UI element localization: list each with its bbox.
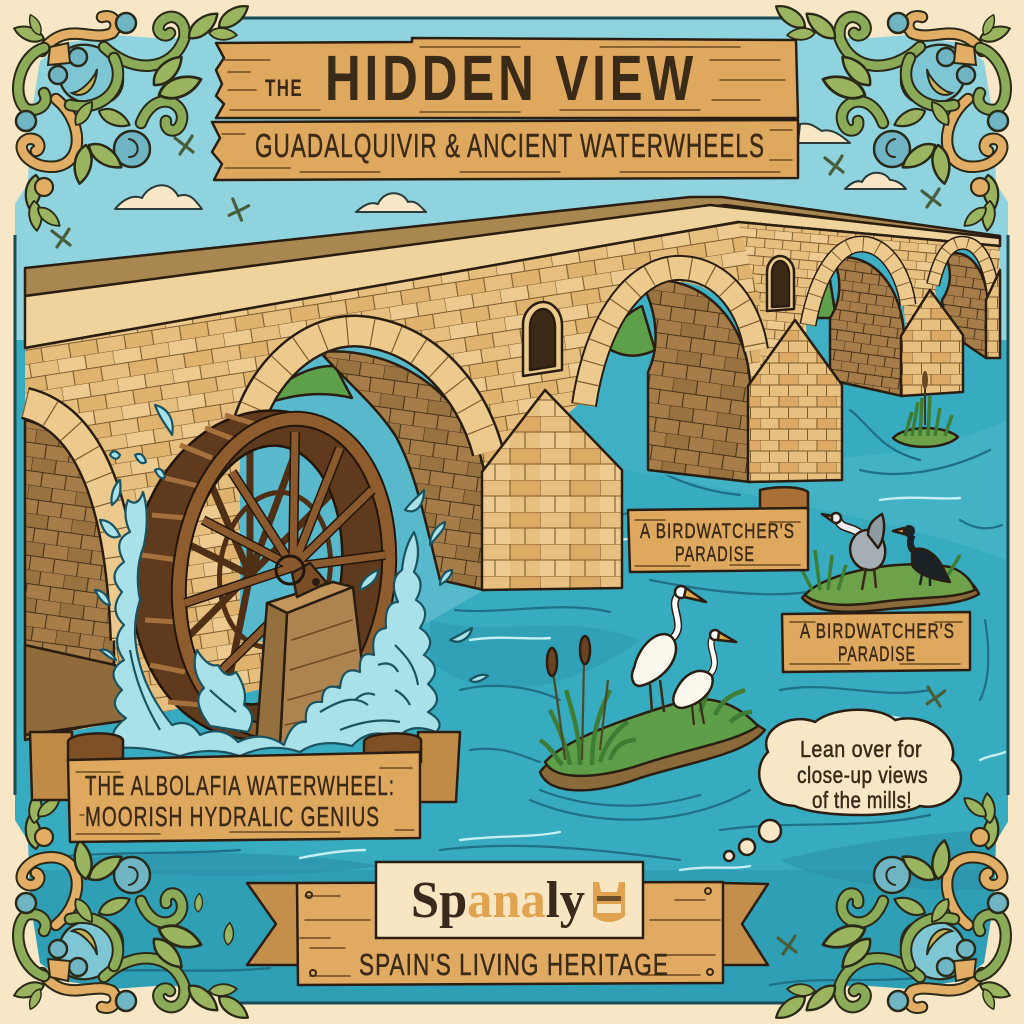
pedestal right face bbox=[280, 587, 370, 745]
pier 3 bbox=[748, 320, 842, 482]
brand emblem bbox=[593, 882, 625, 922]
window 1 bbox=[523, 302, 562, 376]
title small word: THE bbox=[265, 75, 303, 102]
leaves in water bbox=[192, 893, 237, 946]
title main: HIDDEN VIEW bbox=[325, 42, 697, 114]
logo plate bbox=[376, 862, 643, 938]
label: birdwatcher upper: PARADISE bbox=[675, 543, 755, 566]
banner tagline: SPAIN'S LIVING HERITAGE bbox=[359, 947, 669, 982]
egret 1 bbox=[632, 586, 706, 712]
bridge top edge bbox=[25, 222, 1000, 348]
bridge right face bbox=[700, 222, 1000, 400]
pier 5 bbox=[986, 270, 1000, 358]
brand wordmark: Spanaly bbox=[411, 872, 585, 929]
wooden ramp bbox=[25, 645, 130, 735]
pedestal bbox=[267, 582, 353, 613]
title plank upper bbox=[216, 38, 798, 118]
banner tail left bbox=[247, 883, 298, 965]
wheel front rim bbox=[160, 405, 408, 745]
arch rings bbox=[25, 243, 994, 640]
arch 1 inner wall bbox=[25, 420, 114, 740]
arch 2 opening bbox=[240, 346, 484, 650]
thought bubble: close-up views bbox=[797, 762, 928, 788]
window 2 bbox=[767, 256, 794, 311]
subtitle: GUADALQUIVIR & ANCIENT WATERWHEELS bbox=[255, 127, 765, 164]
label: birdwatcher upper: A BIRDWATCHER'S bbox=[640, 520, 795, 543]
arch 3 inner wall bbox=[640, 280, 750, 482]
pedestal left face bbox=[256, 603, 287, 745]
wheel spokes bbox=[185, 432, 385, 687]
label: birdwatcher lower: PARADISE bbox=[838, 643, 916, 666]
arch 4 far bank bbox=[812, 280, 836, 318]
sky birds bbox=[52, 136, 946, 954]
cormorant bbox=[893, 525, 950, 586]
bridge left face bbox=[25, 222, 760, 740]
thought bubble bbox=[724, 710, 961, 861]
thought bubble: Lean over for bbox=[800, 736, 922, 762]
main island bbox=[540, 586, 765, 790]
arch 2 far bank bbox=[262, 366, 352, 405]
wheel back spokes bbox=[185, 440, 345, 700]
bottom banner bbox=[247, 862, 768, 985]
bridge parapet shadow band bbox=[25, 197, 1000, 296]
arch 4 opening bbox=[806, 250, 906, 396]
arch 5 inner wall bbox=[942, 253, 988, 358]
water ripples bbox=[30, 410, 1005, 985]
window 2 opening bbox=[772, 261, 789, 307]
bridge deck bbox=[25, 205, 1000, 348]
arch 3 opening bbox=[560, 282, 750, 482]
label: birdwatcher upper bbox=[628, 487, 808, 572]
waterwheel scroll label: THE ALBOLAFIA WATERWHEEL: bbox=[85, 770, 395, 801]
water splash bbox=[95, 405, 488, 756]
bridge bbox=[25, 197, 1000, 740]
banner tail right bbox=[722, 883, 768, 965]
heron bbox=[822, 513, 885, 590]
arch 2 inner wall bbox=[320, 351, 484, 590]
sky bbox=[15, 18, 1008, 358]
scroll back right bbox=[418, 732, 460, 802]
thought bubble: of the mills! bbox=[812, 787, 912, 813]
wheel drum bbox=[111, 394, 415, 756]
egret 2 bbox=[673, 630, 736, 725]
hub bbox=[292, 563, 327, 597]
pier 4 bbox=[901, 290, 963, 396]
label: birdwatcher lower: A BIRDWATCHER'S bbox=[800, 620, 955, 643]
scroll back left bbox=[30, 732, 72, 800]
arch 5 opening bbox=[935, 250, 988, 358]
river bbox=[15, 340, 1008, 1003]
banner main bbox=[297, 882, 723, 985]
reeds bbox=[540, 662, 752, 765]
window 1 opening bbox=[530, 309, 555, 370]
scroll curl right bbox=[364, 733, 421, 762]
upper island bbox=[802, 513, 979, 612]
arch 4 inner wall bbox=[830, 257, 904, 396]
waterwheel scroll label bbox=[30, 732, 460, 842]
title board bbox=[212, 38, 798, 180]
arch 3 far bank bbox=[603, 306, 655, 356]
scroll front bbox=[68, 752, 420, 842]
wheel paddles bbox=[142, 415, 255, 705]
scroll curl left bbox=[68, 733, 123, 762]
clouds bbox=[115, 124, 906, 212]
label: birdwatcher lower bbox=[782, 612, 970, 672]
small island bbox=[893, 371, 958, 447]
waterwheel bbox=[111, 394, 415, 756]
title plank lower bbox=[212, 120, 798, 180]
pier 2 bbox=[482, 390, 622, 590]
waterwheel scroll label: MOORISH HYDRALIC GENIUS bbox=[85, 801, 380, 832]
